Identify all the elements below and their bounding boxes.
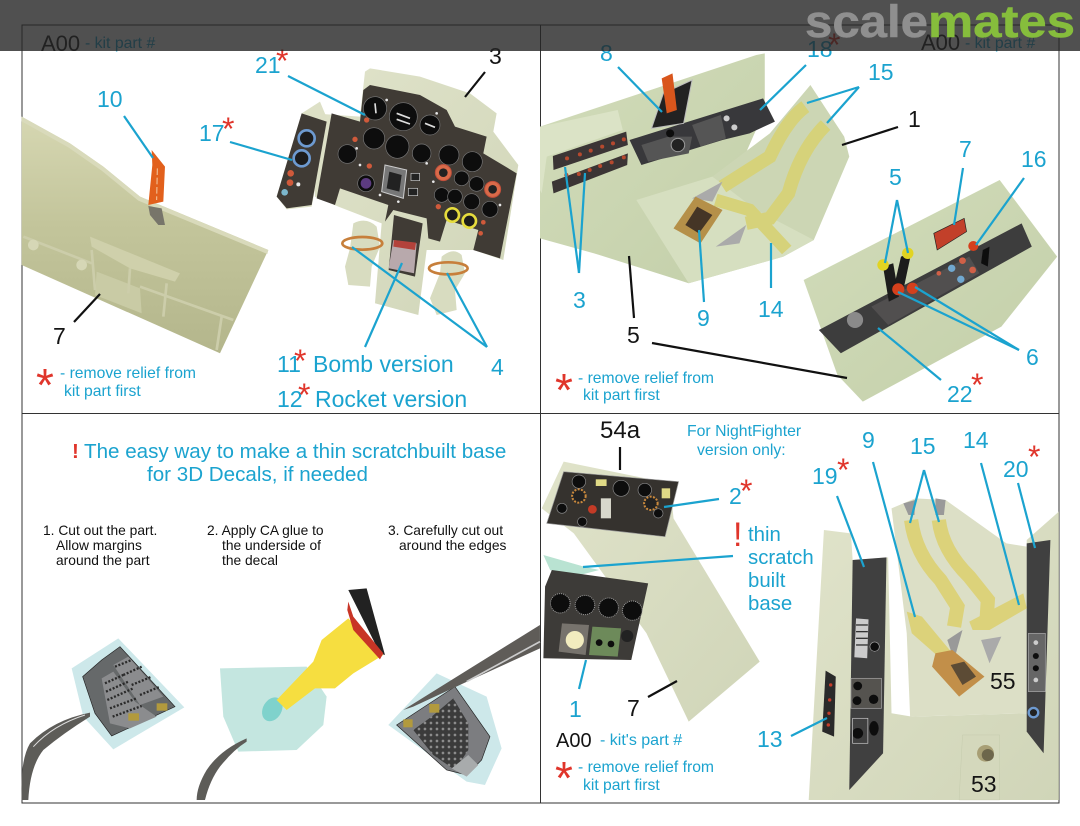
step 3 text [388,523,506,553]
black leader lines [620,447,677,697]
part labels: 9 [862,427,875,453]
legend: kit part [556,730,682,752]
step 1 text: 1. Cut out the part. [43,523,157,538]
red asterisks: * [971,367,983,403]
photos: decal steps [21,588,540,800]
red asterisks: * [740,473,752,509]
logo: scalemates [805,0,1075,47]
part labels: 14 [963,427,989,453]
photo: step 2 glue on decal [197,588,385,800]
kit part labels under header: - kit part # [85,35,155,52]
part labels: 19 [812,463,838,489]
part labels: 10 [97,86,123,112]
part labels: 8 [600,40,613,66]
red asterisks: * [828,27,840,63]
legend: remove relief: kit part first [583,777,660,794]
part labels: 15 [868,59,894,85]
leader lines [124,76,487,347]
part labels: 15 [910,433,936,459]
part labels [569,417,1029,797]
leader lines [565,65,1024,380]
panel: bottom right [542,417,1059,804]
part labels: 9 [697,305,710,331]
part labels: 6 [1026,344,1039,370]
photo: instrument panel [277,68,518,315]
version labels: 11 [277,351,301,377]
red asterisks: * [837,452,849,488]
version labels: Bomb version [313,351,454,377]
kit part labels under header: A00 [921,30,960,55]
part labels: 7 [959,136,972,162]
part labels: 54a [600,417,641,444]
version labels: 12 [277,386,303,412]
step 1 text: Allow margins [56,538,142,553]
heading: The easy way to make a thin scratchbuilt base [84,440,506,463]
legend: remove relief: - remove relief from [578,759,714,776]
legend: remove relief: kit part first [64,383,141,400]
callout: thin scratch built base: ! [733,516,742,554]
part labels: 2 [729,483,742,509]
part labels: 55 [990,668,1016,694]
photo: panels on part 7 [542,462,1059,800]
callout: thin scratch built base: base [748,593,792,615]
red asterisks: * [276,43,288,79]
part labels: 13 [757,726,783,752]
kit part labels under header: - kit part # [965,35,1035,52]
step 1 text [43,523,157,568]
panel: bottom left [21,440,540,800]
version labels [277,351,467,412]
legend: kit part: - kit's part # [600,732,682,749]
part labels: 20 [1003,456,1029,482]
step 2 text: the underside of [222,538,321,553]
step 1 text: around the part [56,553,150,568]
red asterisks [828,27,983,403]
black leader lines [74,72,485,322]
legend: remove relief: - remove relief from [60,365,196,382]
step 2 text [207,523,324,568]
part labels: 1 [569,696,582,722]
nightfighter note: For NightFighter [687,423,801,440]
version labels: Rocket version [315,386,467,412]
callout: thin scratch built base: thin [748,524,781,546]
heading [72,440,506,486]
nightfighter note: version only: [697,442,786,459]
part labels: 14 [758,296,784,322]
legend: remove relief: * [555,752,573,804]
black leader lines [629,127,898,378]
part labels [53,43,504,380]
legend: remove relief [555,364,714,416]
callout: thin scratch built base: built [748,570,786,592]
step 3 text: around the edges [399,538,506,553]
legend: remove relief: * [555,364,573,416]
part labels: 3 [489,43,502,69]
red asterisks: * [298,377,310,413]
photo: step 3 cutting with blade [388,625,540,785]
part labels: 22 [947,381,973,407]
part labels: 5 [627,322,640,348]
part labels: 1 [908,106,921,132]
red asterisks: * [1028,439,1040,475]
part labels: 18 [807,36,833,62]
part labels: 21 [255,52,281,78]
step 2 text: 2. Apply CA glue to [207,523,324,538]
heading: for 3D Decals, if needed [147,463,368,486]
part labels: 53 [971,771,997,797]
part labels: 4 [491,354,504,380]
nightfighter note [687,423,801,459]
part labels: 5 [889,164,902,190]
red asterisks [222,43,310,413]
photo: step 1 decal in tweezers [21,638,184,800]
legend: remove relief: kit part first [583,387,660,404]
panel: top right [540,27,1057,416]
part labels: 7 [627,695,640,721]
photo: seat and side wall [540,53,1057,402]
legend: remove relief [555,752,714,804]
header bar [0,0,1080,51]
photo: wing part 7 [22,117,268,353]
legend: remove relief [36,359,196,411]
kit part labels under header [41,30,1035,56]
leader lines [579,462,1035,736]
part labels [573,36,1047,407]
panel: top left [22,43,518,413]
legend: kit part: A00 [556,730,592,752]
step 2 text: the decal [222,553,278,568]
part labels: 17 [199,120,225,146]
legend: remove relief: - remove relief from [578,370,714,387]
callout: thin scratch built base: scratch [748,547,814,569]
part labels: 7 [53,323,66,349]
part labels: 16 [1021,146,1047,172]
heading: ! [72,440,79,463]
callout: thin scratch built base [733,516,814,615]
red asterisks: * [294,343,306,379]
red asterisks: * [222,111,234,147]
red asterisks [740,439,1040,509]
step 3 text: 3. Carefully cut out [388,523,503,538]
kit part labels under header: A00 [41,31,80,56]
part labels: 3 [573,287,586,313]
icon: orange lever 10 [148,150,165,225]
legend: remove relief: * [36,359,54,411]
